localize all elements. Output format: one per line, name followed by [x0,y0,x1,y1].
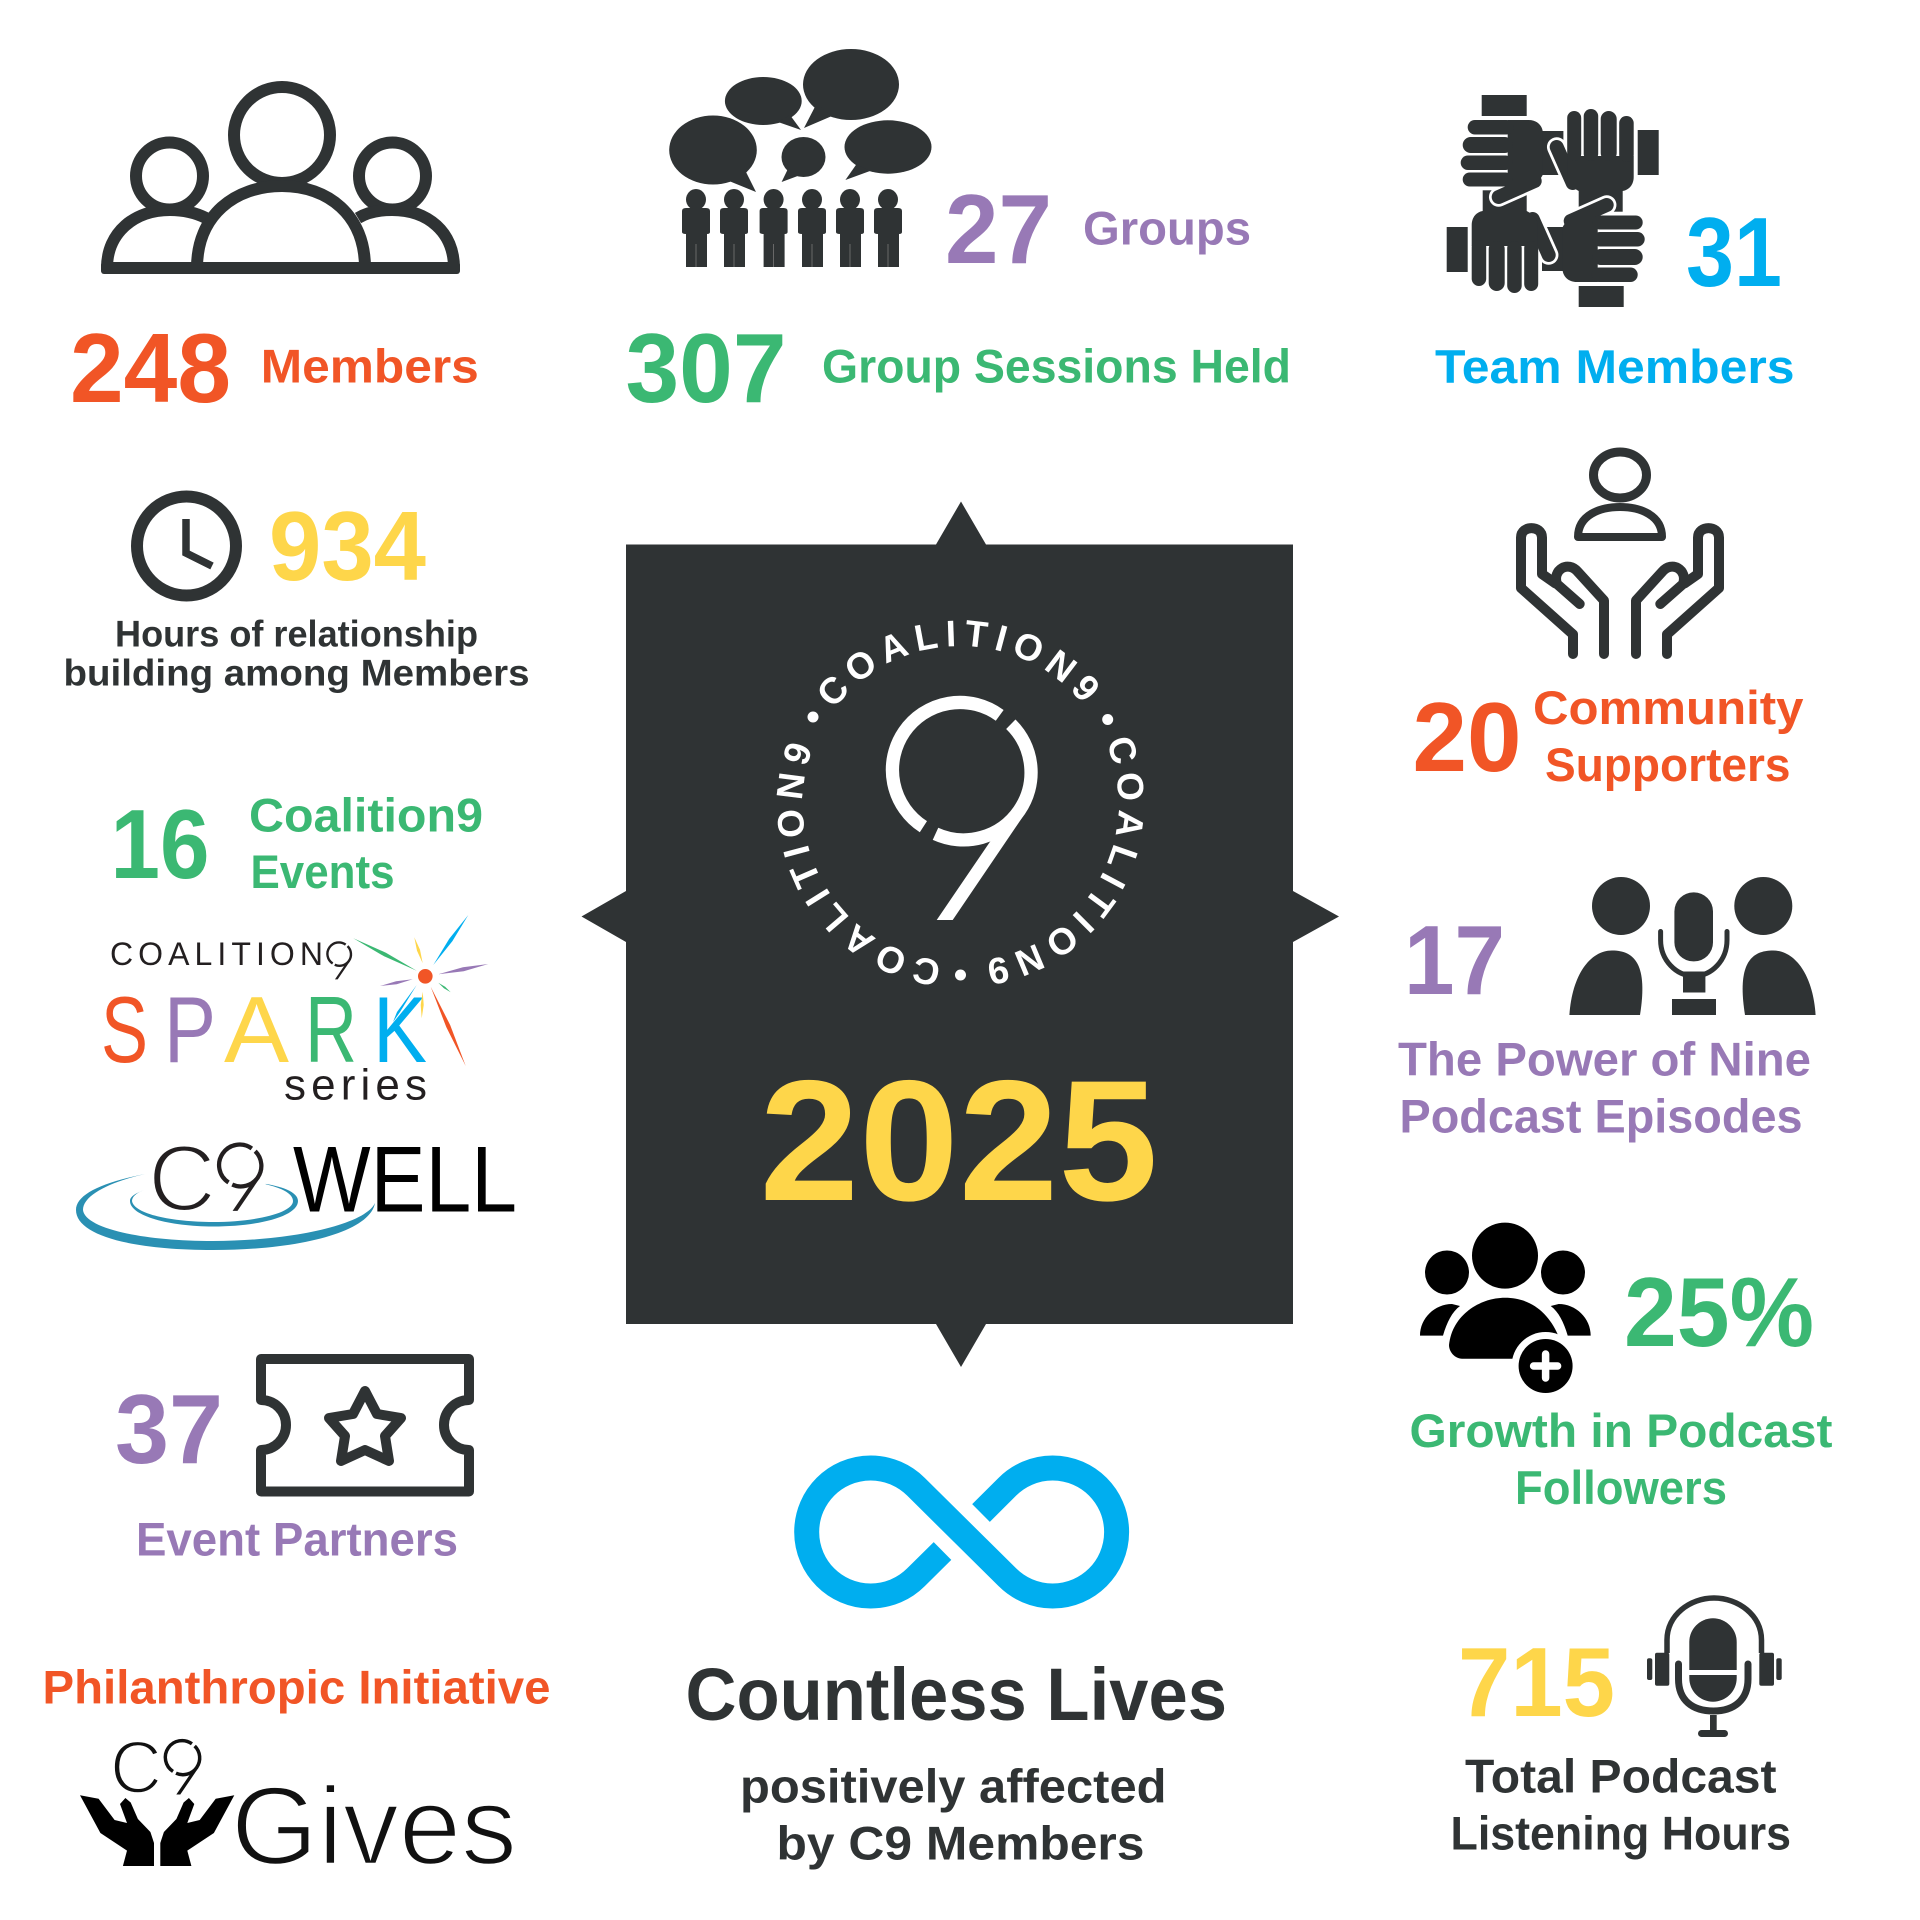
logo: c9 gives: Gives [231,1765,517,1888]
logo nine [215,1141,266,1212]
circular wordmark: COALITION9 [820,620,1098,704]
panel: central badge [582,502,1339,1367]
wordmark: series: series [284,1060,427,1109]
icon: speech bubbles and people [669,49,932,267]
circular wordmark [776,620,1144,984]
label: hours of relationship: Hours of relationship [115,614,478,654]
stat: 934: 934 [269,491,426,601]
stat: 31: 31 [1686,197,1782,307]
label: Events: Events [250,845,394,898]
panel: group sessions [626,313,1291,423]
wordmark: spark: A [224,977,289,1082]
label: Team Members: Team Members [1435,340,1794,393]
panel: podcast followers growth [1410,1223,1833,1514]
stat: 37: 37 [115,1374,223,1484]
wordmark: spark: S [101,977,148,1082]
logo: c9 gives [80,1726,517,1888]
logo: c9 well [76,1126,517,1250]
stat: 307: 307 [626,313,786,423]
icon: infinity [807,1468,1117,1596]
panel: community supporters [1412,452,1804,792]
panel: coalition9 events [110,789,483,899]
panel: listening hours [1450,1598,1791,1859]
logo: spark series [101,915,488,1109]
panel: team members [1435,95,1794,393]
label: Group Sessions Held: Group Sessions Held [822,340,1291,393]
label: building among members: building among Members [64,652,530,694]
stat: 20: 20 [1412,682,1522,792]
panel: relationship hours [64,491,530,694]
icon: microphone with headphones [1647,1598,1782,1737]
heading: Philanthropic Initiative: Philanthropic Initiative [42,1661,550,1714]
heading: Countless Lives: Countless Lives [686,1653,1227,1736]
wordmark: coalition: COALITION [110,936,323,972]
stat: 248: 248 [70,313,231,423]
icon: clock [137,496,236,596]
panel: members [70,87,479,423]
label: Coalition9: Coalition9 [249,789,483,842]
panel: groups [669,49,1251,284]
icon: person in open hands [1521,452,1719,654]
circular wordmark: COALITION9 [988,738,1144,984]
label: by C9 Members: by C9 Members [776,1816,1144,1869]
stat: 17: 17 [1404,905,1505,1015]
label: Supporters: Supporters [1545,738,1790,791]
label: Podcast Episodes: Podcast Episodes [1400,1089,1802,1142]
stat: 25%: 25% [1624,1257,1814,1367]
label: Groups: Groups [1083,202,1251,254]
wordmark: spark: P [164,977,216,1082]
wordmark: spark: K [373,977,427,1082]
panel: philanthropic initiative [42,1661,550,1888]
label: positively affected: positively affected [740,1759,1166,1812]
year: 2025: 2025 [760,1045,1158,1237]
panel: event partners [115,1359,469,1566]
wordmark: well: WELL [293,1126,517,1232]
label: Growth in Podcast: Growth in Podcast [1410,1404,1833,1457]
wordmark: spark: R [305,977,357,1082]
icon: spark burst [353,915,488,1066]
panel: countless lives [686,1468,1227,1869]
swoosh: inner ripple [130,1183,298,1226]
icon: ticket with star [261,1359,469,1492]
label: Listening Hours: Listening Hours [1450,1806,1791,1859]
icon: two people and microphone [1569,877,1816,1015]
logo: nine mark [892,702,1031,920]
label: The Power of Nine: The Power of Nine [1398,1032,1811,1086]
label: Members: Members [261,340,479,392]
circular wordmark: COALITION9 [776,744,938,984]
wordmark: spark [101,977,427,1082]
label: Followers: Followers [1515,1461,1727,1514]
label: Total Podcast: Total Podcast [1465,1749,1777,1802]
stat: 715: 715 [1458,1627,1615,1737]
icon: group with plus [1420,1223,1591,1400]
wordmark: c: C [148,1126,216,1230]
stat: 16: 16 [110,789,210,899]
swoosh: outer ripple [76,1174,375,1250]
logo nine [327,942,351,979]
panel: podcast episodes [1398,877,1816,1142]
label: Event Partners: Event Partners [136,1513,458,1566]
badge background [582,502,1339,1367]
icon: three people [101,87,460,274]
stat: 27: 27 [945,174,1052,284]
logo: c9 gives: C [110,1726,162,1809]
label: Community: Community [1533,681,1804,734]
icon: four interlocked hands [1447,95,1659,307]
